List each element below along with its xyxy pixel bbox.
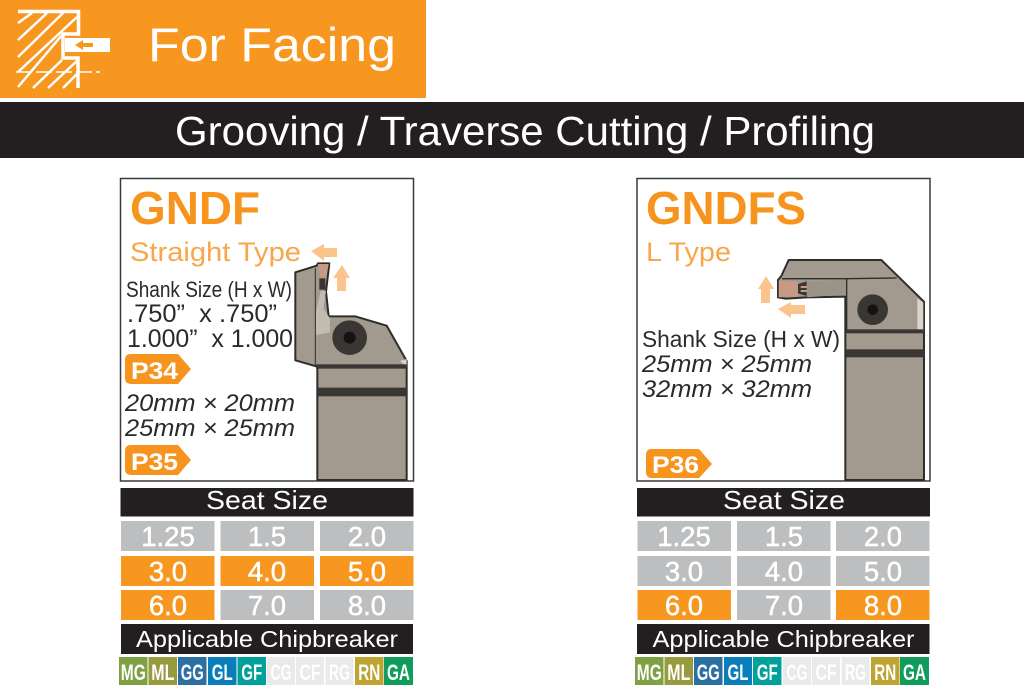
seat size table: GNDF: 5.0 (348, 556, 386, 587)
seat size table: GNDF: 2.0 (348, 521, 386, 552)
chipbreaker table: GNDF: GL (212, 660, 233, 685)
chipbreaker table: GNDF: Applicable Chipbreaker (136, 626, 398, 652)
section heading bar: Grooving / Traverse Cutting / Profiling (175, 108, 875, 154)
chipbreaker table: GNDFS: Applicable Chipbreaker (652, 626, 915, 652)
shank sizes metric: 20mm × 20mm (124, 390, 295, 417)
shank sizes (641, 326, 840, 403)
shank sizes: 32mm × 32mm (642, 376, 812, 403)
shank sizes inch: .750” x .750” (127, 300, 277, 328)
chipbreaker table: GNDFS: GG (697, 660, 720, 685)
seat size table: GNDFS: Seat Size (723, 485, 845, 515)
chipbreaker table: GNDFS: GL (728, 660, 748, 685)
chipbreaker table: GNDF: RN (358, 660, 380, 685)
chipbreaker table: GNDF: ML (151, 660, 174, 685)
panel: GNDFS (637, 178, 930, 481)
tool illustration: GNDFS (778, 260, 924, 480)
shank sizes: 25mm × 25mm (641, 351, 812, 378)
icon: facing operation (16, 12, 110, 88)
chipbreaker table: GNDFS: GA (903, 660, 926, 685)
chipbreaker table: GNDFS: CF (816, 660, 836, 685)
seat size table: GNDFS: 5.0 (864, 556, 902, 587)
seat size table: GNDF: 6.0 (149, 590, 187, 621)
seat size table: GNDFS: 4.0 (765, 556, 803, 587)
seat size table: GNDFS: 1.25 (657, 521, 711, 552)
chipbreaker table: GNDF (119, 624, 413, 685)
shank sizes: Shank Size (H x W) (642, 326, 840, 352)
seat size table: GNDF: 1.25 (141, 521, 195, 552)
header banner: For Facing (0, 0, 426, 98)
seat size table: GNDF: Seat Size (206, 485, 328, 515)
shank sizes inch: Shank Size (H x W) (126, 277, 292, 302)
chipbreaker table: GNDFS: GF (757, 660, 778, 685)
chipbreaker table: GNDF: CG (270, 660, 292, 685)
chipbreaker table: GNDFS (635, 624, 930, 685)
tool illustration: GNDF (295, 263, 407, 480)
seat size table: GNDFS: 6.0 (665, 590, 703, 621)
arrows (758, 276, 805, 318)
seat size table: GNDFS: 8.0 (864, 590, 902, 621)
chipbreaker table: GNDFS: MG (637, 660, 662, 685)
page tag P36: P36 (652, 452, 699, 479)
chipbreaker table: GNDFS: ML (667, 660, 690, 685)
seat size table: GNDF: 1.5 (248, 521, 286, 552)
seat size table: GNDF: 3.0 (149, 556, 187, 587)
page tag P35: P35 (131, 449, 178, 476)
page tag P34: P34 (131, 358, 179, 385)
seat size table: GNDF (120, 485, 414, 621)
seat size table: GNDF: 8.0 (348, 590, 386, 621)
arrows (311, 244, 350, 291)
type label: L Type (646, 237, 731, 267)
seat size table: GNDFS: 1.5 (765, 521, 803, 552)
chipbreaker table: GNDFS: RN (874, 660, 896, 685)
chipbreaker table: GNDF: GF (241, 660, 262, 685)
shank sizes metric (124, 390, 295, 442)
banner title: For Facing (148, 19, 396, 72)
page tag P35 (125, 445, 191, 476)
seat size table: GNDF: 4.0 (248, 556, 286, 587)
panel: GNDF (120, 178, 414, 481)
type label: Straight Type (130, 237, 301, 267)
shank sizes metric: 25mm × 25mm (124, 415, 295, 442)
seat size table: GNDF: 7.0 (248, 590, 286, 621)
page tag P36 (646, 449, 712, 479)
model name: GNDFS (646, 182, 806, 234)
chipbreaker table: GNDFS: RG (845, 660, 866, 685)
seat size table: GNDFS (637, 485, 930, 621)
chipbreaker table: GNDF: GG (181, 660, 204, 685)
chipbreaker table: GNDF: GA (387, 660, 410, 685)
shank sizes inch (126, 277, 293, 353)
chipbreaker table: GNDFS: CG (786, 660, 808, 685)
seat size table: GNDFS: 7.0 (765, 590, 803, 621)
section heading bar (0, 102, 1024, 158)
shank sizes inch: 1.000” x 1.000 (127, 325, 293, 353)
model name: GNDF (130, 182, 260, 234)
page tag P34 (125, 354, 191, 385)
chipbreaker table: GNDF: RG (329, 660, 350, 685)
seat size table: GNDFS: 3.0 (665, 556, 703, 587)
chipbreaker table: GNDF: MG (121, 660, 146, 685)
seat size table: GNDFS: 2.0 (864, 521, 902, 552)
chipbreaker table: GNDF: CF (300, 660, 320, 685)
